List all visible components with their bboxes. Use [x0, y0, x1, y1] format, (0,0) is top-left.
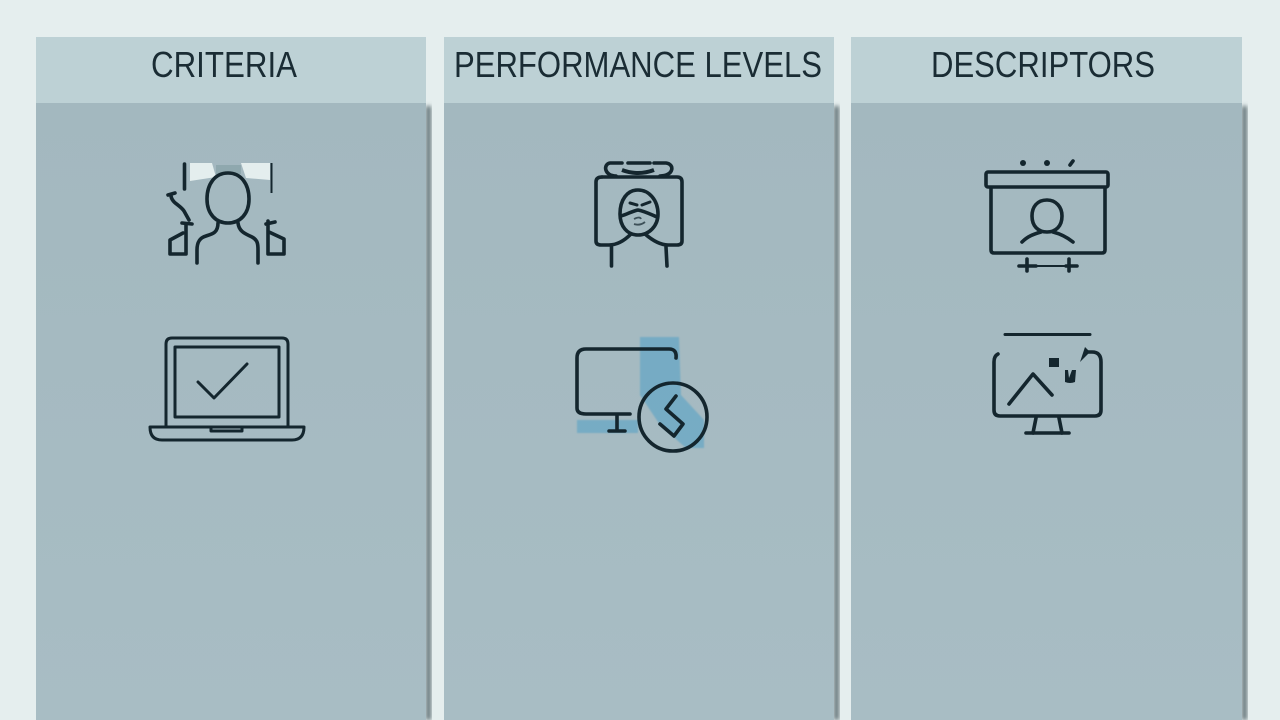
icon: person with spray bottles	[168, 163, 284, 263]
icon: presenter on projection screen	[986, 160, 1108, 271]
heading: descriptors: DESCRIPTORS	[931, 44, 1155, 85]
icon: monitor with dollar coin	[577, 337, 707, 451]
criteria header band	[36, 37, 426, 103]
heading: performance levels: PERFORMANCE LEVELS	[454, 44, 822, 85]
performance levels header band	[444, 37, 834, 103]
icon: masked person on screen	[596, 163, 682, 266]
heading: criteria: CRITERIA	[151, 44, 297, 85]
descriptors header band	[851, 37, 1242, 103]
panel: descriptors	[851, 37, 1247, 720]
icon: monitor with mountain chart	[994, 334, 1101, 433]
icon: laptop with checkmark	[150, 338, 304, 440]
panel: performance levels	[444, 37, 839, 720]
panel: criteria	[36, 37, 431, 720]
